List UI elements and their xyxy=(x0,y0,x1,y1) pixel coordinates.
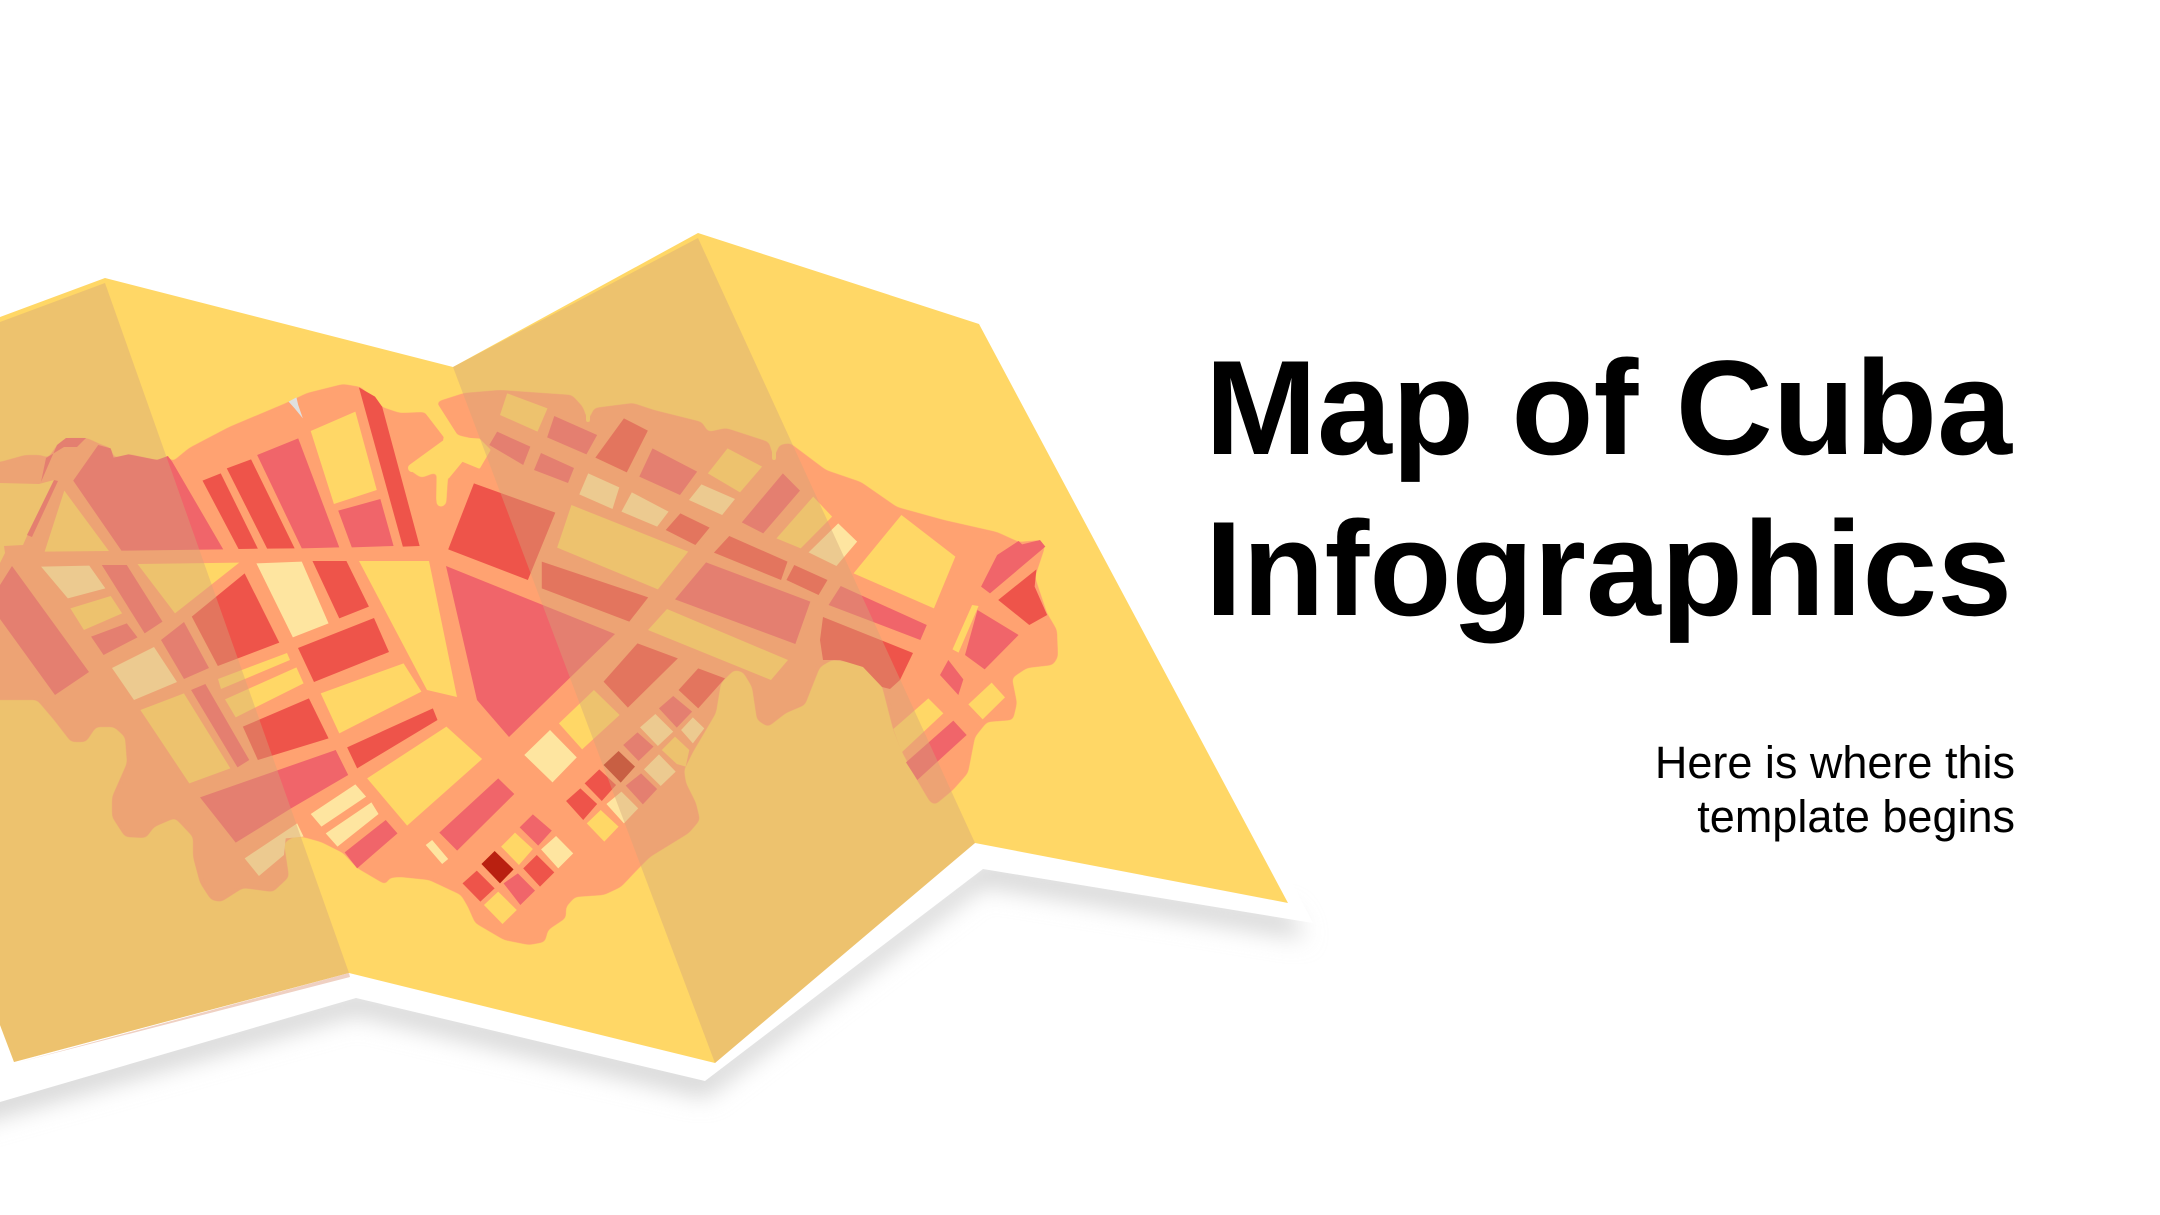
title: Map of Cuba xyxy=(1205,332,2013,483)
title xyxy=(1205,332,2013,644)
title: Infographics xyxy=(1205,493,2012,644)
map: north-east city blocks xyxy=(542,416,1047,669)
map: western bay water xyxy=(0,480,54,563)
map: central long blocks xyxy=(648,609,913,689)
subtitle: Here is where this xyxy=(1655,737,2015,788)
paper white backing xyxy=(0,324,1313,1102)
map: eastern tip blocks xyxy=(893,660,1005,780)
fold shading: left panel xyxy=(0,283,349,1062)
map: south-east small square blocks xyxy=(462,643,725,924)
left panel bottom edge highlight xyxy=(20,973,350,1062)
map: harbour inlets xyxy=(412,402,774,502)
paper drop shadow xyxy=(0,860,1305,1128)
folded map sheet xyxy=(0,233,1288,1063)
map: Cuba land mass xyxy=(0,384,1058,945)
subtitle: template begins xyxy=(1697,791,2015,842)
map: western sliver blocks xyxy=(0,438,615,737)
subtitle xyxy=(1655,737,2015,842)
map: south-west city blocks xyxy=(140,663,514,876)
map: north-west city blocks xyxy=(41,387,555,666)
fold shading: middle panel xyxy=(453,238,975,1063)
